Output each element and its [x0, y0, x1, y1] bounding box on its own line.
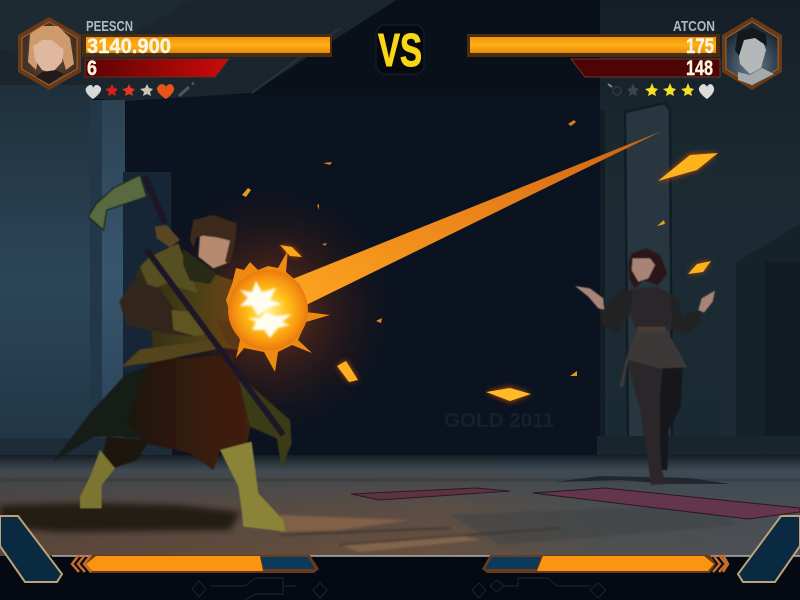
rear legs	[103, 437, 150, 468]
energy beam	[262, 131, 662, 312]
bottom HUD band	[0, 555, 800, 600]
energy bar	[85, 59, 229, 77]
right boot	[220, 442, 285, 532]
opponent name: ATCON	[673, 18, 715, 35]
cape	[53, 367, 150, 462]
hair	[628, 248, 667, 288]
faint circuit right	[472, 578, 606, 598]
health value: 3140.900	[87, 35, 171, 58]
scythe blade	[88, 175, 147, 230]
right sleeve	[217, 320, 249, 352]
corner panel: left	[0, 516, 62, 582]
white flare top	[240, 281, 282, 316]
portrait: opponent	[722, 17, 782, 90]
left arm	[119, 280, 207, 337]
left hand	[575, 286, 604, 309]
faint circuit left	[192, 578, 327, 600]
status icons	[608, 83, 714, 99]
portrait: player	[18, 17, 81, 90]
health bar	[82, 34, 332, 57]
coat lower	[127, 355, 250, 470]
glove	[172, 310, 211, 337]
shoulder cape	[140, 243, 198, 293]
player HUD	[18, 17, 332, 99]
scarf	[183, 248, 217, 284]
health value: 175	[686, 35, 714, 58]
opponent HUD	[467, 17, 782, 99]
scythe pole	[145, 177, 283, 435]
VS badge: VS	[378, 24, 422, 76]
torso	[627, 287, 673, 330]
rug: small	[351, 488, 510, 500]
chevrons	[72, 555, 91, 572]
health bar	[467, 34, 720, 57]
energy value: 148	[686, 57, 713, 80]
character: opponent in dark suit	[575, 248, 715, 485]
opponent shadow	[555, 476, 730, 484]
player name: PEESCN	[86, 18, 133, 35]
white flare bottom	[248, 312, 292, 338]
energy bar: left	[72, 555, 319, 573]
right hand	[698, 291, 715, 313]
character: player with scythe	[53, 175, 292, 532]
front leg	[627, 360, 667, 485]
corner panel: right	[738, 516, 800, 582]
floor: wooden planks	[0, 455, 800, 557]
rear leg	[658, 367, 683, 470]
belt	[637, 327, 666, 331]
jacket skirt	[619, 330, 687, 387]
energy bar: right	[482, 555, 728, 573]
glow around explosion	[145, 185, 395, 435]
face	[632, 258, 655, 282]
hair	[190, 215, 237, 264]
energy value: 6	[87, 57, 97, 80]
face	[198, 235, 235, 268]
left boot	[80, 450, 115, 508]
faint watermark text: GOLD 2011	[444, 410, 554, 432]
energy bar	[571, 59, 720, 77]
right arm	[670, 293, 703, 333]
chevrons	[713, 555, 728, 572]
scythe head binding	[155, 225, 180, 247]
player shadow	[0, 503, 240, 532]
rug: large	[533, 488, 800, 519]
sparks	[242, 120, 718, 402]
coat right tail	[237, 373, 292, 468]
explosion burst	[226, 250, 330, 372]
torso	[135, 243, 247, 357]
belt	[122, 339, 220, 367]
left arm	[600, 288, 633, 333]
status icons	[86, 83, 194, 99]
